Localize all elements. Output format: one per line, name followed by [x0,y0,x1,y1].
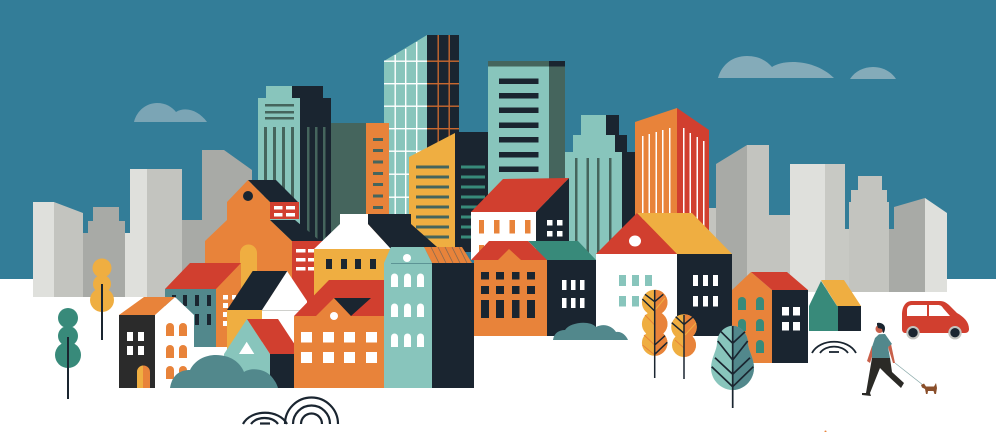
tower: orange and red [635,108,709,260]
house: white with red roof [471,178,569,260]
house: centre orange with red roof [294,280,384,388]
sky background [0,0,996,279]
tower: stepped teal [565,115,637,262]
background building: right grey group [709,145,947,292]
leash [895,363,923,385]
house: tall teal and dark [384,247,474,388]
man: arms [867,344,895,363]
dog [921,383,937,394]
arcs: bottom left ground marks [243,398,338,424]
tree: green left [55,308,81,399]
cloud: right large [718,56,834,78]
tree: yellow left [90,258,114,340]
cloud: left [134,103,207,122]
tree: autumn short [671,314,697,379]
tree: teal leaf [711,326,754,408]
house: orange with dark annex and green roof [471,241,596,336]
tower: dark green and orange [331,123,389,243]
tower: teal with dark bars [488,61,565,201]
house: yellow with white and dark roof [314,214,437,304]
car [902,301,969,339]
house: large white with red and yellow roof [596,213,732,336]
man: hair [877,323,885,333]
cloud: right small [850,67,896,79]
background building: left stepped tower [83,207,130,297]
house: small green and yellow [809,280,861,331]
house: black and white with orange roof [119,297,194,388]
arcs: right ground mark [812,342,856,353]
tower: teal with dark side [258,86,331,245]
house: small teal with red roof [224,319,301,388]
orange dot at bottom edge [824,430,826,432]
man: torso [872,334,892,358]
house: orange with dark side and red roof [732,272,808,363]
ground [0,279,996,432]
man: head [876,325,884,333]
bush: small slate [553,323,628,340]
tower: glass grid [384,35,459,240]
person walking dog [862,323,937,396]
background building: tall pale tower [130,169,182,297]
house: orange church with red annex [205,180,326,303]
bush: large slate [170,355,278,388]
background building: grey tower [182,150,252,297]
house: red roof with slate wall [165,263,241,347]
background building: left pale tower [33,202,83,297]
tree: autumn tall [642,290,668,378]
house: dark and white gable [227,271,307,360]
man: legs [862,358,904,396]
tower: yellow striped [409,132,489,252]
